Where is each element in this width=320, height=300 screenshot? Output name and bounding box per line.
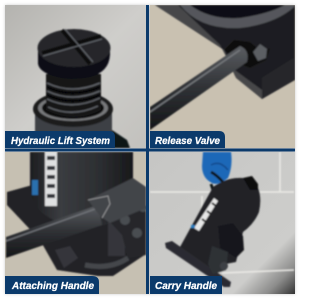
pump assembly [55,204,147,268]
release handle [150,46,248,130]
label: Attaching Handle [5,276,99,294]
label: Carry Handle: Carry Handle [155,280,217,292]
label strip [191,198,218,231]
panel: release valve [150,5,295,148]
jack body below collar [34,112,113,132]
dividers [146,5,149,294]
label: Carry Handle [150,276,222,294]
panel: attaching handle [5,152,147,294]
label: Hydraulic Lift System [5,131,115,148]
label: Release Valve [150,131,225,148]
jack base [155,5,295,99]
warning label [32,152,57,206]
blue glove [202,152,232,184]
base plate [7,184,146,276]
pump on jack [208,223,244,274]
label: Release Valve: Release Valve [155,135,220,147]
panel: hydraulic lift system [5,5,146,148]
jack body [180,178,260,268]
carry strap [208,170,224,190]
jack body [30,152,133,227]
ram cap [38,29,110,79]
collar [33,91,113,127]
threaded ram [46,74,101,117]
valve socket [224,40,270,68]
label: Hydraulic Lift System: Hydraulic Lift System [11,135,110,147]
jack cylinder [180,5,294,28]
panel: carry handle [150,152,295,294]
label: Attaching Handle: Attaching Handle [11,280,94,292]
attached handle [6,178,146,258]
brick wall joints [150,152,294,273]
base plate [165,241,231,287]
